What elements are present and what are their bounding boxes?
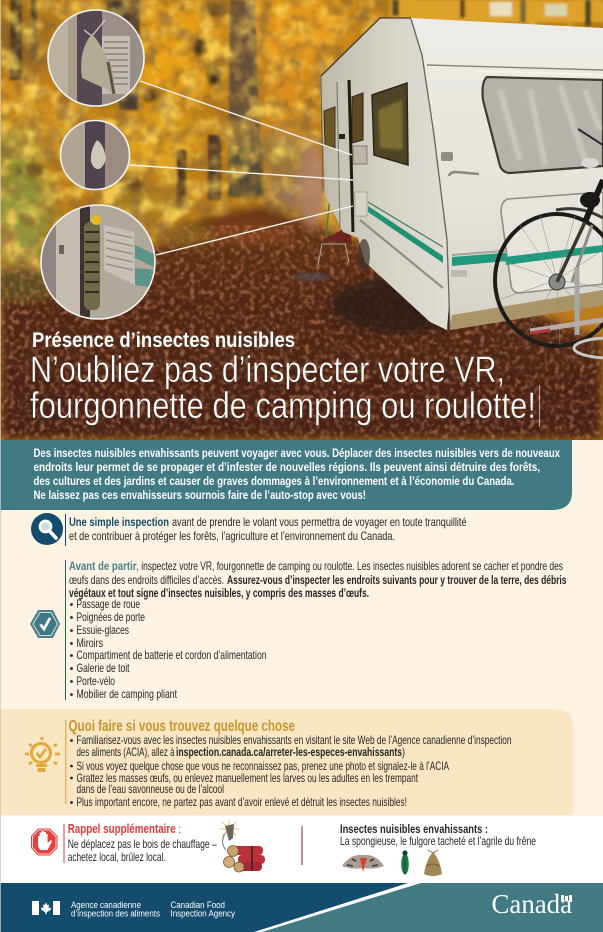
latch and handle bbox=[441, 152, 453, 161]
action list: inspection.canada.ca/arreter-les-especes-envahissants bbox=[176, 745, 402, 759]
inspection text: et de contribuer à protéger les forêts, l’agriculture et l’environnement du Canada. bbox=[69, 529, 395, 543]
forest backdrop bbox=[0, 0, 603, 440]
before leaving text: Avant de partir bbox=[69, 559, 137, 573]
action list: dans de l’eau savonneuse ou de l’alcool bbox=[76, 782, 224, 796]
large side window bbox=[482, 77, 603, 173]
inspection text: avant de prendre le volant vous permettra de voyager en toute tranquillité bbox=[172, 515, 467, 529]
reminder text bbox=[68, 822, 217, 864]
reminder text: : bbox=[178, 822, 181, 836]
main title: N’oubliez pas d’inspecter votre VR, bbox=[30, 348, 505, 390]
checklist of places to inspect: Mobilier de camping pliant bbox=[76, 687, 177, 701]
checklist of places to inspect: Miroirs bbox=[76, 636, 103, 650]
agency name in English: Inspection Agency bbox=[170, 908, 236, 918]
leader lines from insets to caravan bbox=[130, 81, 353, 255]
inset: caterpillar bbox=[40, 204, 156, 320]
checklist of places to inspect: Porte-vélo bbox=[76, 674, 115, 688]
icon: magnifying glass bbox=[31, 513, 63, 545]
Canadian flag signature bbox=[32, 901, 60, 915]
panel: what to do bbox=[0, 709, 573, 815]
reminder text: achetez local, brûlez local. bbox=[68, 850, 166, 864]
action list: Si vous voyez quelque chose que vous ne reconnaissez pas, prenez une photo et signalez-le à l’ACIA bbox=[76, 759, 449, 773]
checklist of places to inspect: Compartiment de batterie et cordon d’alimentation bbox=[76, 648, 266, 662]
species text bbox=[340, 822, 536, 848]
action list: ) bbox=[402, 745, 405, 759]
icon: light bulb with check bbox=[25, 737, 60, 772]
title kicker: Présence d’insectes nuisibles bbox=[32, 329, 295, 352]
before leaving text: œufs dans des endroits difficiles d’accès. bbox=[69, 573, 224, 587]
before leaving text bbox=[69, 559, 567, 600]
agency name in English: Canadian Food bbox=[170, 900, 225, 910]
title block bbox=[30, 329, 540, 427]
intro banner bbox=[0, 440, 572, 510]
caravan front face bbox=[321, 18, 450, 330]
section: simple inspection bbox=[31, 513, 467, 546]
Canada wordmark: Canada bbox=[492, 889, 572, 919]
action list: Plus important encore, ne partez pas avant d’avoir enlevé et détruit les insectes nuisibles! bbox=[76, 795, 407, 809]
section: before leaving bbox=[30, 559, 567, 701]
caravan side wall bbox=[411, 18, 603, 330]
inset: adult moth bbox=[48, 10, 144, 106]
vents on front face bbox=[353, 146, 367, 164]
bicycle on rack bbox=[495, 129, 603, 358]
checklist of places to inspect bbox=[70, 597, 266, 701]
trunks bbox=[10, 0, 262, 208]
wheel well shadow bbox=[358, 239, 370, 271]
agency name in English bbox=[170, 900, 236, 918]
storage hatch bbox=[501, 192, 603, 293]
wall stripes bbox=[452, 252, 506, 266]
camping chair bbox=[318, 202, 352, 266]
before leaving text: végétaux et tout signe d’insectes nuisibles, y compris des masses d’œufs. bbox=[69, 586, 369, 600]
icon: emerald ash borer bbox=[401, 850, 409, 874]
icon: firewood dynamite bbox=[220, 819, 265, 872]
main title bbox=[30, 348, 540, 427]
caravan bbox=[321, 18, 603, 330]
agency name in French: d’inspection des aliments bbox=[71, 908, 161, 918]
species text: Insectes nuisibles envahissants : bbox=[340, 822, 488, 836]
inset: egg mass bbox=[60, 120, 130, 190]
checklist of places to inspect: Essuie-glaces bbox=[76, 623, 129, 637]
intro banner: Ne laissez pas ces envahisseurs sournois faire de l’auto-stop avec vous! bbox=[34, 488, 366, 502]
action list: Grattez les masses œufs, ou enlevez manuellement les larves ou les adultes en les trempant bbox=[76, 771, 418, 785]
icon: stop hand bbox=[31, 828, 58, 856]
inspection text: Une simple inspection bbox=[69, 515, 169, 529]
agency name in French bbox=[71, 900, 161, 918]
action list: des aliments (ACIA), allez à bbox=[76, 745, 175, 759]
heading: Quoi faire si vous trouvez quelque chose bbox=[68, 718, 295, 735]
icon: spongy moth bbox=[424, 850, 442, 876]
panel: additional reminder and species bbox=[0, 816, 603, 883]
leaf-covered ground bbox=[0, 140, 603, 440]
icon: check hexagon bbox=[30, 610, 60, 638]
inspection text bbox=[69, 515, 467, 543]
checklist of places to inspect: Galerie de toit bbox=[76, 661, 130, 675]
treetops above caravan bbox=[390, 0, 603, 26]
footer band bbox=[0, 883, 603, 932]
lower trim bbox=[450, 290, 603, 330]
agency name in French: Agence canadienne bbox=[71, 900, 141, 910]
action list bbox=[70, 733, 511, 809]
icon: spotted lanternfly bbox=[342, 855, 384, 872]
door bbox=[340, 227, 342, 228]
checklist of places to inspect: Passage de roue bbox=[76, 597, 140, 611]
checklist of places to inspect: Poignées de porte bbox=[76, 610, 145, 624]
reminder text: Rappel supplémentaire bbox=[68, 822, 176, 836]
roof rail bbox=[427, 65, 603, 70]
front windows bbox=[372, 83, 408, 165]
reminder text: Ne déplacez pas le bois de chauffage – bbox=[68, 837, 217, 851]
photo: caravan in an autumn forest bbox=[0, 0, 603, 440]
